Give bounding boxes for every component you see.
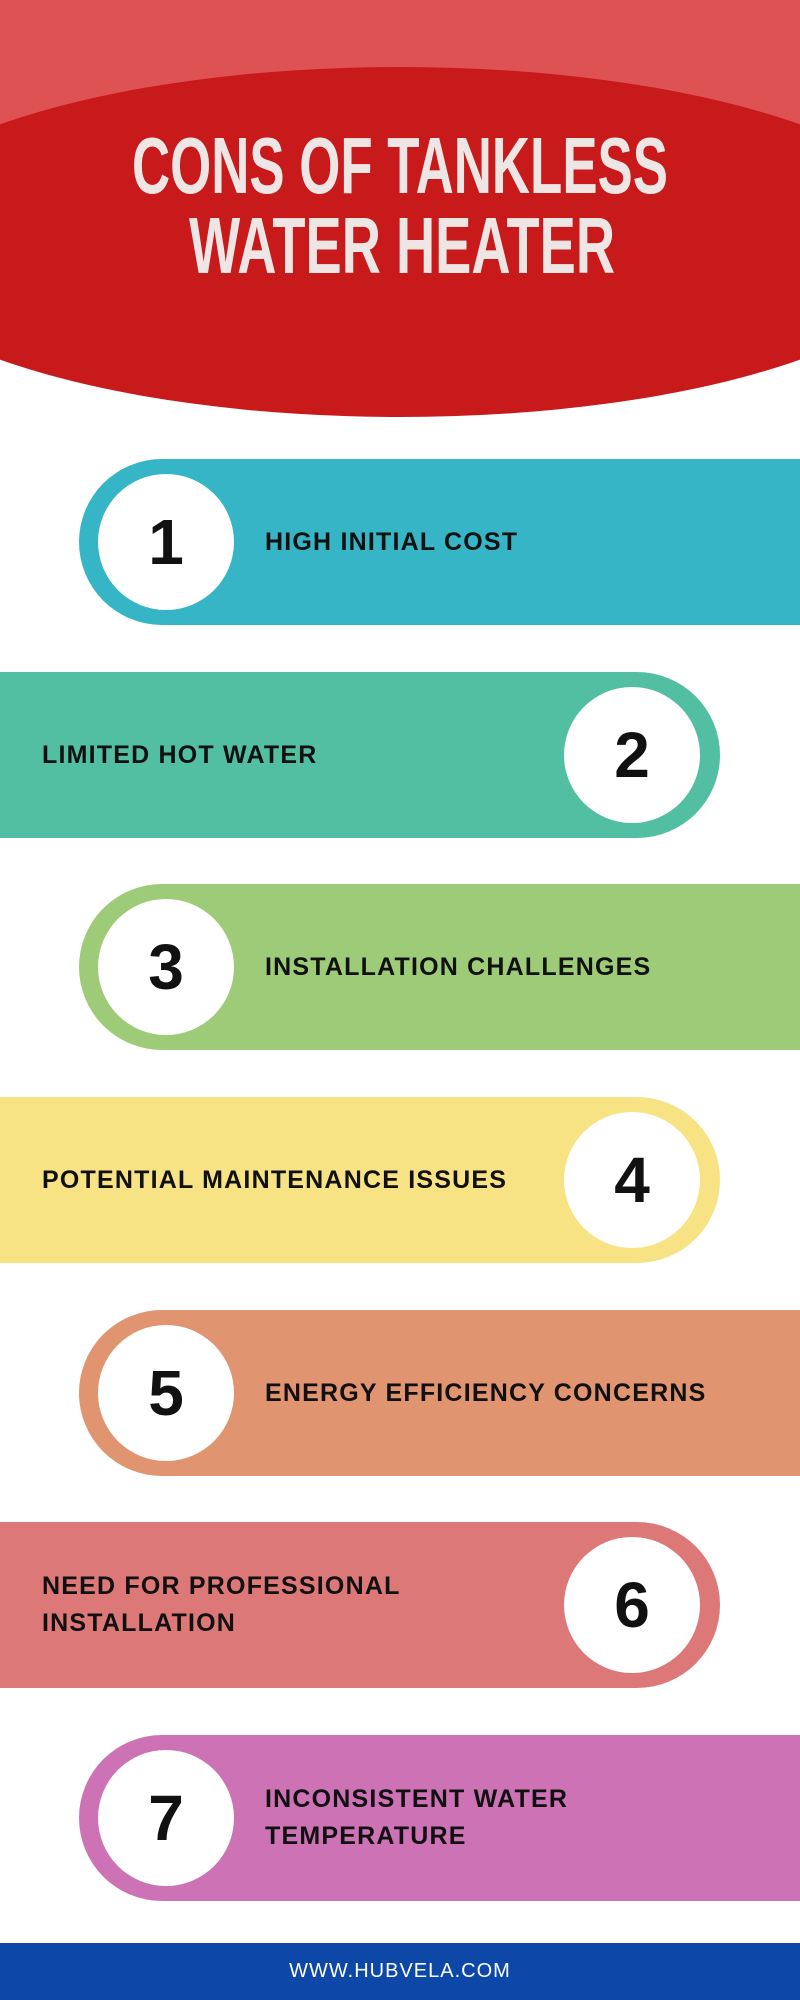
- footer: WWW.HUBVELA.COM: [289, 1960, 511, 1982]
- title: WATER HEATER: [189, 201, 615, 290]
- item 2: [0, 672, 720, 838]
- footer: [0, 1943, 800, 2000]
- item 5: ENERGY EFFICIENCY CONCERNS: [265, 1378, 706, 1406]
- item 3: 3: [148, 931, 184, 1003]
- title: [132, 121, 668, 290]
- item 6: [0, 1522, 720, 1688]
- item 2: LIMITED HOT WATER: [42, 740, 317, 768]
- item 2: 2: [614, 719, 650, 791]
- item 3: [79, 884, 800, 1050]
- item 3: INSTALLATION CHALLENGES: [265, 952, 651, 980]
- item 5: 5: [148, 1357, 184, 1429]
- item 6: INSTALLATION: [42, 1609, 236, 1637]
- item 5: [79, 1310, 800, 1476]
- item 1: 1: [148, 506, 184, 578]
- item 6: 6: [614, 1569, 650, 1641]
- item 7: TEMPERATURE: [265, 1822, 467, 1850]
- item 1: [79, 459, 800, 625]
- item 7: 7: [148, 1782, 184, 1854]
- item 4: 4: [614, 1144, 650, 1216]
- item 1: HIGH INITIAL COST: [265, 528, 518, 556]
- header: [0, 0, 800, 417]
- item 4: [0, 1097, 720, 1263]
- item 7: INCONSISTENT WATER: [265, 1785, 568, 1813]
- item 6: NEED FOR PROFESSIONAL: [42, 1572, 401, 1600]
- item 4: POTENTIAL MAINTENANCE ISSUES: [42, 1166, 507, 1194]
- item 7: [79, 1735, 800, 1901]
